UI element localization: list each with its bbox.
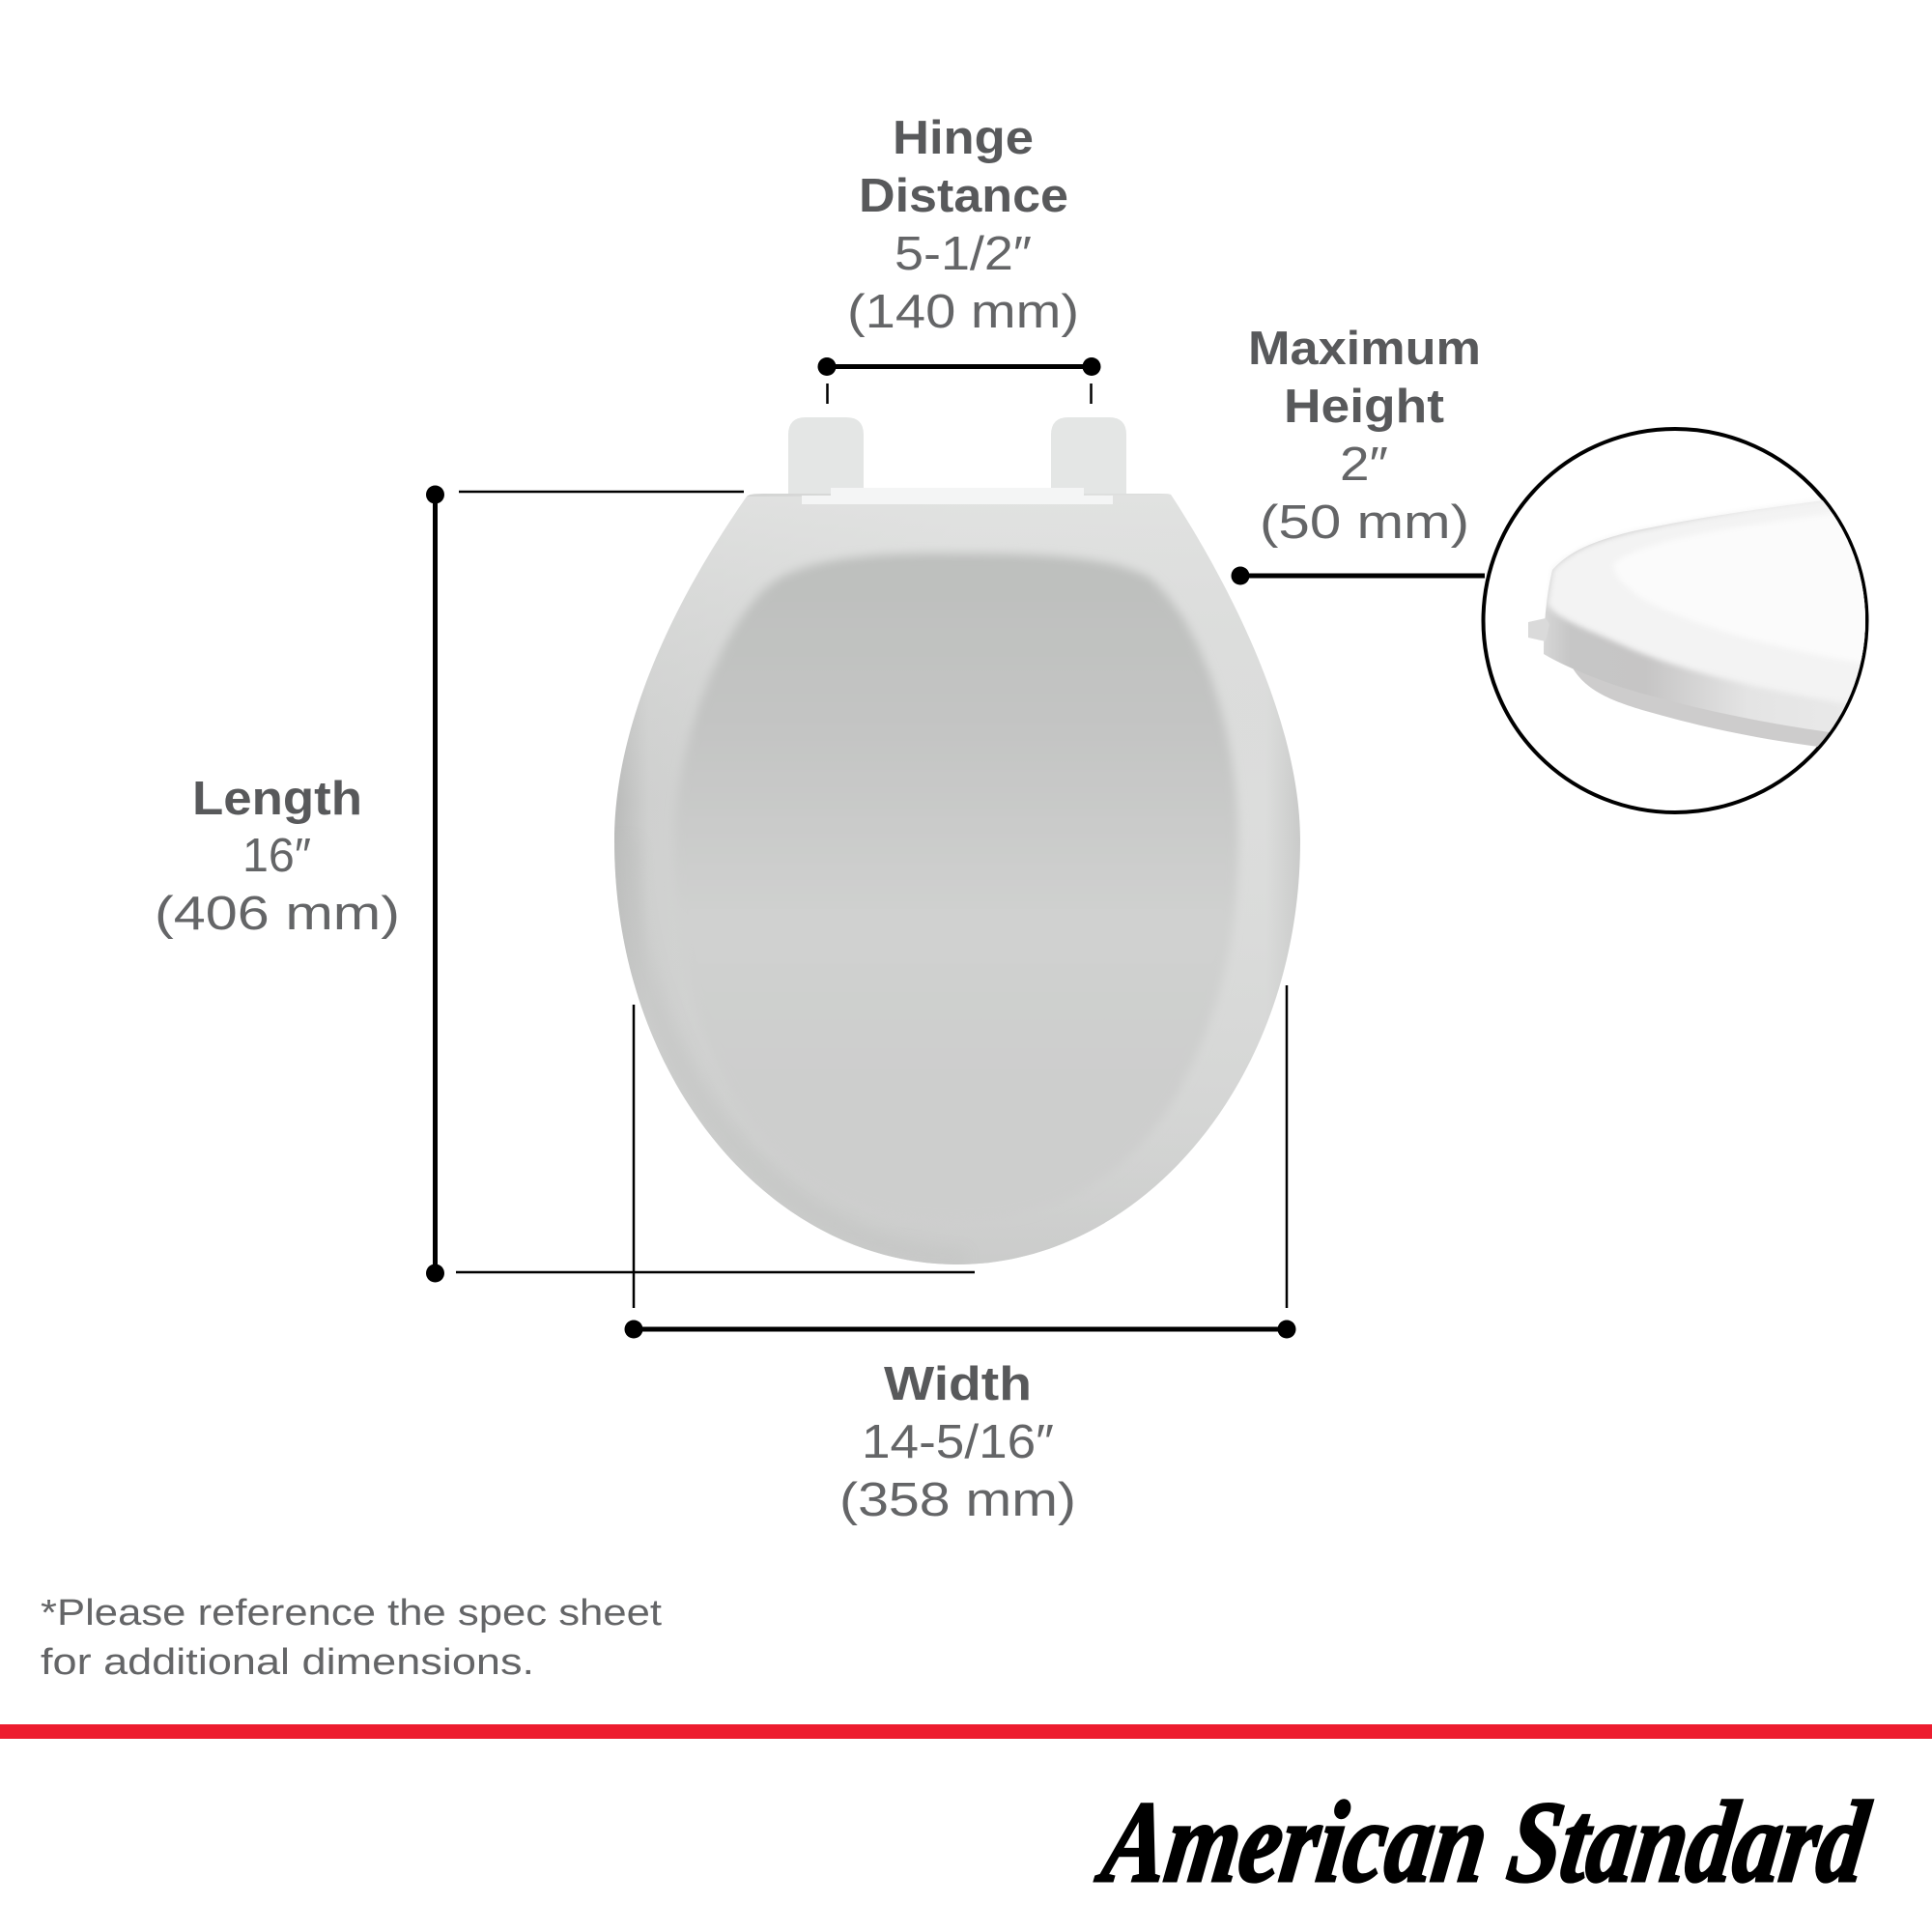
- maximum height label: (50 mm): [1260, 497, 1469, 549]
- width label: [839, 1358, 1076, 1526]
- length label: Length: [192, 773, 362, 825]
- width dimension line: [624, 985, 1296, 1339]
- hinge distance label: Distance: [859, 170, 1068, 222]
- length label: 16″: [242, 830, 311, 882]
- length dimension line: [426, 485, 975, 1283]
- seat outer rim: [614, 494, 1300, 1264]
- maximum height label: Height: [1284, 381, 1444, 433]
- length label: [155, 773, 400, 940]
- seat recessed centre: [674, 554, 1238, 1221]
- inset seat profile: [1544, 493, 1884, 753]
- width label: 14-5/16″: [862, 1416, 1054, 1468]
- maximum height label: Maximum: [1248, 323, 1481, 375]
- inset bumper: [1528, 618, 1549, 641]
- hinge distance label: 5-1/2″: [895, 228, 1032, 280]
- hinge bar: [802, 488, 1113, 504]
- side profile inset: [1484, 429, 1884, 812]
- left hinge post: [788, 417, 864, 496]
- right hinge post: [1051, 417, 1126, 496]
- footnote: *Please reference the spec sheet: [41, 1593, 663, 1634]
- hinge distance label: (140 mm): [847, 286, 1079, 338]
- width label: (358 mm): [839, 1474, 1076, 1526]
- hinge distance dimension line: [817, 357, 1101, 404]
- rim vertical shading: [662, 497, 1240, 1264]
- maximum height label: [1248, 323, 1481, 549]
- maximum height leader line: [1231, 566, 1485, 585]
- width label: Width: [884, 1358, 1032, 1410]
- footnote: [41, 1593, 663, 1683]
- hinge distance label: Hinge: [893, 112, 1034, 164]
- footnote: for additional dimensions.: [41, 1642, 534, 1683]
- inset circle: [1484, 429, 1866, 812]
- maximum height label: 2″: [1340, 439, 1388, 491]
- red divider bar: [0, 1724, 1932, 1739]
- hinge distance label: [847, 112, 1079, 338]
- length label: (406 mm): [155, 888, 400, 940]
- seat front view illustration: [609, 417, 1304, 1270]
